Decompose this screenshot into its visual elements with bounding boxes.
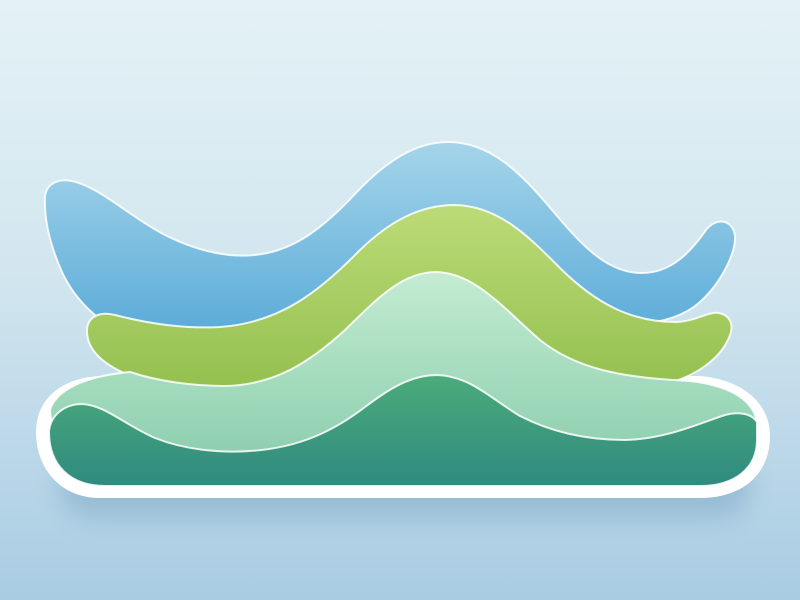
light green wave layer <box>87 205 732 392</box>
blue wave layer <box>45 142 735 335</box>
dark green wave layer <box>49 375 757 486</box>
base shadow <box>60 455 750 517</box>
mint wave layer <box>50 272 756 470</box>
white base pill <box>36 376 770 498</box>
